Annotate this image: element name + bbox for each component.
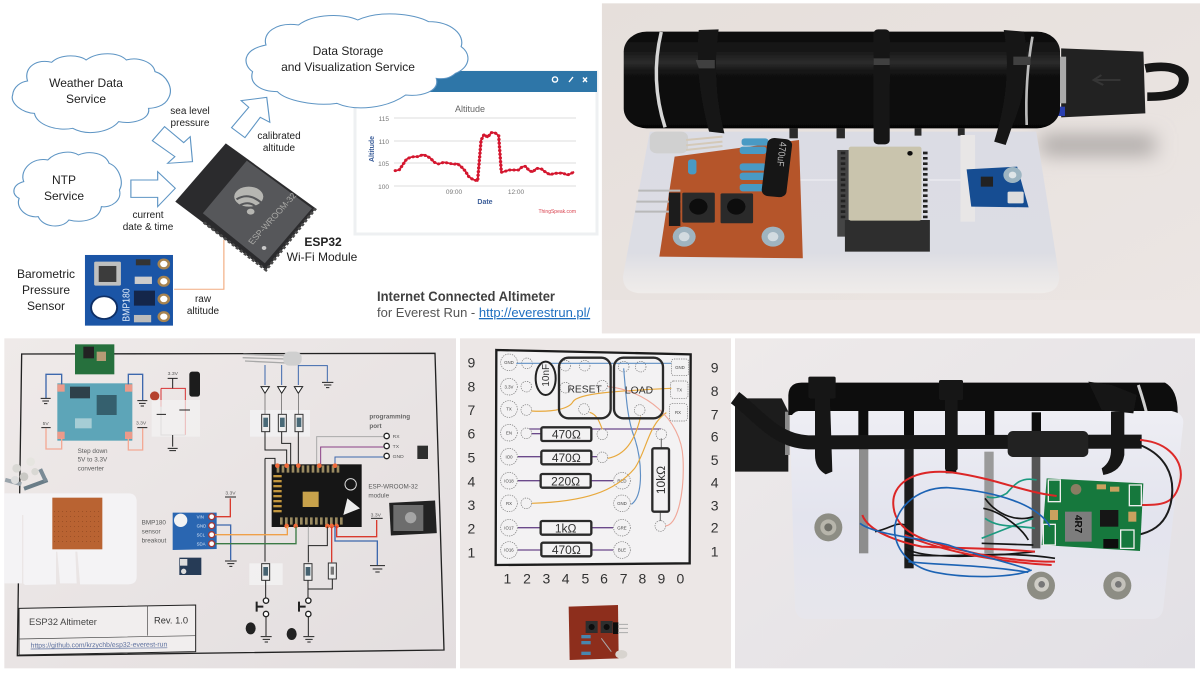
column numbers: 7 — [620, 570, 628, 586]
wire: red and black leads — [1137, 440, 1181, 535]
capacitors — [150, 371, 200, 451]
pads right: TX — [677, 388, 682, 393]
screws — [814, 513, 1131, 600]
converter schematic: 3.3V — [136, 420, 147, 426]
pads right: RX — [675, 410, 681, 415]
power and ground connections: 3.3V — [371, 513, 382, 519]
pad labels left: IO18 — [504, 478, 514, 483]
resistors: 220Ω — [551, 474, 580, 488]
label: Barometric Pressure Sensor: Sensor — [27, 299, 65, 313]
ESP-WROOM-32 board drawing — [272, 463, 362, 528]
label: programming port: port — [369, 423, 383, 430]
cloud: NTP service — [14, 152, 121, 226]
BMP sensor on plate — [967, 167, 1029, 207]
programming port pins: TX — [393, 444, 400, 450]
panel: schematic on paper — [4, 338, 456, 668]
photo: small sensor — [179, 558, 201, 575]
chart: ThingSpeak altitude: Date — [477, 199, 493, 206]
tube — [788, 383, 1178, 415]
step down photo module — [75, 344, 114, 374]
connector: raw altitude line — [174, 240, 224, 289]
chart: ThingSpeak altitude — [355, 71, 597, 234]
icon: BMP180 sensor board — [85, 255, 173, 326]
row numbers left: 5 — [467, 450, 475, 466]
label: current date and time: date & time — [123, 222, 174, 233]
row numbers right: 1 — [711, 544, 719, 560]
label: Weather Data Service: Service — [66, 92, 106, 106]
subtitle: for Everest Run link: for Everest Run - http://everestrun.pl/ — [377, 305, 591, 320]
zip ties — [808, 377, 1137, 475]
label: ESP-WROOM-32 module: ESP-WROOM-32 — [368, 483, 418, 490]
prototype board: 470uF — [775, 141, 788, 167]
row numbers left: 2 — [467, 520, 475, 536]
arrow: current date and time — [131, 172, 175, 207]
photo: plate with board — [4, 493, 137, 585]
resistors: 1kΩ — [555, 521, 577, 535]
component: 10nF capacitor: 10nF — [541, 364, 552, 387]
photo: ESP32 module small — [389, 501, 437, 536]
arrow: sea level pressure — [152, 127, 192, 163]
label: Barometric Pressure Sensor: Pressure — [22, 283, 70, 297]
label: step down converter: 5V to 3.3V — [78, 457, 108, 464]
chart: ThingSpeak altitude: 110 — [379, 139, 389, 146]
chart: ThingSpeak altitude: ThingSpeak.com — [538, 209, 576, 215]
row numbers right: 4 — [711, 475, 719, 491]
row numbers left — [467, 354, 475, 560]
icon: ESP32 module: ESP-WROOM-32 — [246, 191, 299, 246]
component: RESET button: RESET — [567, 384, 603, 395]
column numbers: 9 — [657, 570, 665, 586]
pads right — [669, 359, 689, 421]
plate — [623, 132, 1059, 293]
icon: ESP32 module — [175, 143, 316, 270]
label: ESP32 Wi-Fi Module: ESP32 — [304, 235, 342, 249]
label: raw altitude: altitude — [187, 306, 220, 317]
BMP180 breakout drawing: 3.3V — [225, 490, 236, 496]
label: NTP Service: NTP — [52, 173, 76, 187]
programming port pins: GND — [393, 454, 404, 460]
label: Weather Data Service: Weather Data — [49, 76, 123, 90]
label: programming port: programming — [369, 414, 410, 421]
row numbers left: 6 — [467, 425, 475, 441]
pad labels left: 3.3V — [505, 384, 514, 389]
title: Internet Connected Altimeter: Internet Connected Altimeter — [377, 289, 556, 304]
resistors — [541, 427, 669, 557]
power and ground connections — [308, 513, 385, 572]
converter schematic — [41, 374, 147, 450]
chart: ThingSpeak altitude: 12:00 — [508, 189, 525, 196]
chart: ThingSpeak altitude: 115 — [379, 116, 389, 123]
label: current date and time: current — [132, 210, 164, 221]
RGB LED and resistors — [243, 352, 333, 562]
pad labels left: EN — [506, 430, 512, 435]
title block link: https://github.com/krzychb/esp32-everest-run — [31, 641, 168, 650]
label: Barometric Pressure Sensor: Barometric — [17, 267, 75, 281]
schematic outline — [17, 353, 444, 656]
label: BMP180 sensor breakout: sensor — [142, 529, 161, 536]
label: step down converter: converter — [78, 465, 104, 472]
title block name: ESP32 Altimeter — [29, 617, 97, 627]
ESP32 module on plate — [837, 147, 930, 252]
resistors: 470Ω — [552, 428, 581, 442]
label: sea level pressure: pressure — [171, 118, 210, 129]
traces purple — [518, 429, 661, 550]
hardware screws — [5, 457, 48, 491]
label: NTP Service: Service — [44, 189, 84, 203]
pads right: GND — [675, 365, 685, 370]
component: RESET button — [559, 358, 611, 418]
title block — [19, 605, 196, 655]
column numbers: 8 — [638, 570, 646, 586]
USB plug — [735, 398, 788, 472]
row numbers right — [711, 359, 719, 560]
row numbers left: 9 — [467, 354, 475, 370]
resistors: 10kΩ — [654, 466, 668, 494]
BMP180 breakout drawing: SDA — [197, 541, 206, 546]
chart: ThingSpeak altitude: Altitude — [369, 136, 376, 162]
column numbers: 6 — [600, 570, 608, 586]
panel: system diagram — [0, 0, 600, 335]
label: ESP-WROOM-32 module: module — [368, 492, 390, 499]
row numbers right: 2 — [711, 520, 719, 536]
BMP180 breakout drawing: GND — [197, 523, 206, 528]
wires — [516, 363, 683, 526]
cloud: weather data service — [12, 54, 170, 133]
panel: protoboard layout — [460, 338, 731, 668]
wire: black bundle — [875, 498, 1055, 558]
photo: assembled board — [569, 605, 628, 660]
label: Data Storage and Visualization Service: Data Storage — [313, 44, 383, 58]
resistors: 470Ω — [552, 543, 581, 557]
prototype board — [635, 132, 803, 258]
reset and load button circuits — [246, 563, 336, 642]
USB plug and cable — [1057, 48, 1184, 117]
panel: photo of assembled altimeter front — [602, 3, 1200, 333]
slots — [858, 410, 1041, 568]
layout grid — [496, 350, 691, 565]
row numbers right: 9 — [711, 359, 719, 375]
label: BMP180 sensor breakout: breakout — [142, 537, 167, 544]
pad labels center: GND — [617, 501, 627, 506]
arrow: calibrated altitude — [232, 97, 270, 138]
pad labels left — [501, 354, 517, 558]
component: LOAD button: LOAD — [625, 386, 653, 397]
label: calibrated altitude: calibrated — [257, 131, 301, 142]
title block revision: Rev. 1.0 — [154, 616, 188, 626]
component: LOAD button — [614, 358, 663, 418]
cable — [735, 398, 1142, 457]
resistors: 470Ω — [552, 451, 581, 465]
programming port pins — [317, 433, 428, 465]
column numbers: 2 — [523, 570, 531, 586]
pad labels left: TX — [506, 407, 512, 412]
panel: photo of altimeter back — [735, 338, 1195, 668]
pad labels left: IO16 — [504, 548, 514, 553]
programming port pins: RX — [393, 434, 400, 440]
column numbers: 0 — [676, 570, 684, 586]
label: raw altitude: raw — [195, 294, 211, 305]
row numbers left: 1 — [467, 544, 475, 560]
wire: blue — [860, 488, 1050, 577]
row numbers right: 5 — [711, 452, 719, 468]
column numbers — [503, 570, 684, 586]
column numbers: 5 — [581, 570, 589, 586]
pad labels center: BLE — [618, 548, 626, 553]
pad labels center: GRE — [617, 525, 627, 530]
row numbers left: 8 — [467, 379, 475, 395]
column numbers: 1 — [503, 570, 511, 586]
column numbers: 3 — [542, 570, 550, 586]
row numbers left: 3 — [467, 497, 475, 513]
row numbers left: 7 — [467, 402, 475, 418]
pad labels center: RED — [617, 478, 627, 483]
icon: BMP180 sensor board: BMP180 — [121, 288, 131, 322]
row numbers right: 6 — [711, 429, 719, 445]
chart: ThingSpeak altitude: 100 — [378, 184, 389, 191]
pad labels left: GND — [504, 360, 514, 365]
pad labels left: RX — [506, 501, 512, 506]
tube — [624, 29, 1060, 145]
component: 10nF capacitor — [536, 362, 556, 395]
BMP180 breakout drawing — [173, 490, 296, 566]
label: ESP32 Wi-Fi Module: Wi-Fi Module — [287, 250, 358, 264]
voltage regulator board — [1042, 478, 1143, 551]
chart: ThingSpeak altitude: 09:00 — [446, 189, 463, 196]
wire: green bundle — [982, 479, 1037, 538]
converter schematic: 5V — [43, 421, 49, 427]
row numbers right: 7 — [711, 406, 719, 422]
voltage regulator board: 4R7 — [1072, 515, 1083, 534]
label: sea level pressure: sea level — [170, 106, 210, 117]
chart: ThingSpeak altitude: 105 — [378, 161, 389, 168]
pad labels left: IO0 — [506, 454, 513, 459]
cloud: data storage — [246, 14, 468, 108]
BMP180 breakout drawing: VIN — [197, 514, 204, 519]
label: BMP180 sensor breakout: BMP180 — [142, 519, 166, 526]
BMP180 breakout drawing: SCL — [197, 532, 206, 537]
capacitors: 3.3V — [168, 371, 179, 377]
row numbers left: 4 — [467, 474, 475, 490]
label: Data Storage and Visualization Service: and Visualization Service — [281, 60, 415, 74]
row numbers right: 3 — [711, 498, 719, 514]
chart: ThingSpeak altitude: Altitude — [455, 104, 485, 114]
wire: red — [862, 472, 1057, 565]
holes and pads — [521, 358, 667, 558]
label: step down converter: Step down — [78, 448, 108, 455]
label: calibrated altitude: altitude — [263, 143, 296, 154]
row numbers right: 8 — [711, 383, 719, 399]
pad labels center — [617, 478, 627, 553]
pad labels left: IO17 — [504, 525, 514, 530]
column numbers: 4 — [562, 570, 570, 586]
plate — [790, 411, 1183, 619]
